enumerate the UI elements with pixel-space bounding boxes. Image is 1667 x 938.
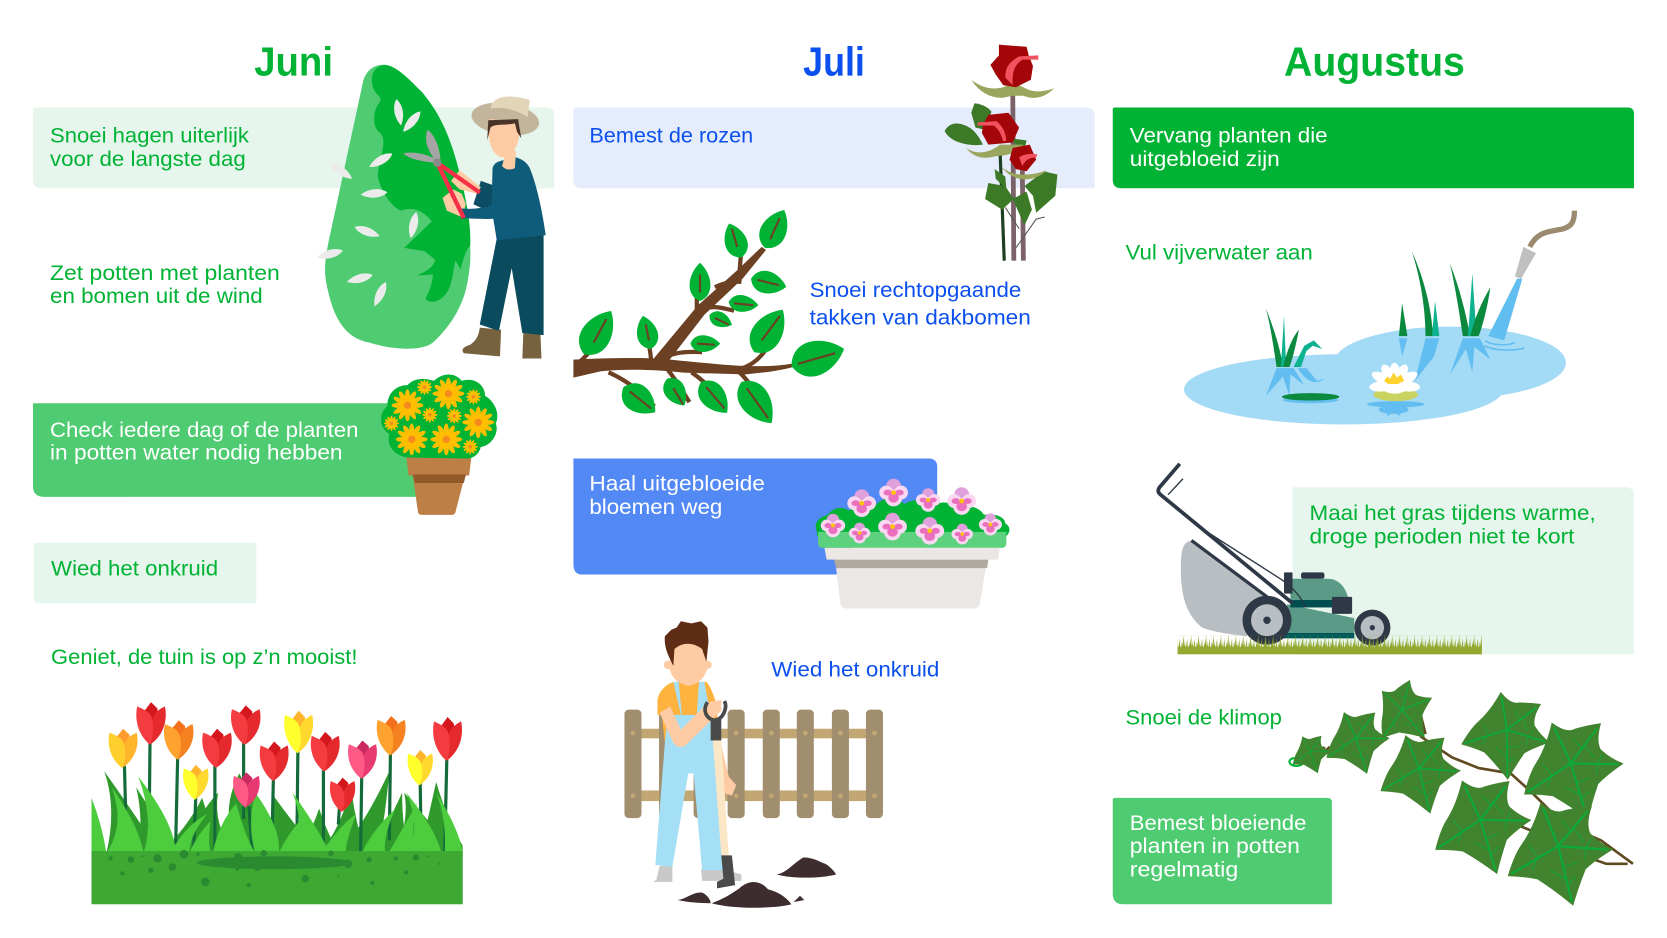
text: vijverwater: Vul vijverwater aan bbox=[1126, 241, 1313, 265]
gardener with hat and shears bbox=[403, 97, 546, 359]
text: planten water: Check iedere dag of de planten bbox=[50, 418, 359, 442]
water lily bbox=[1367, 362, 1424, 416]
reed plants bbox=[1266, 251, 1490, 367]
illustration: pond bbox=[1184, 211, 1574, 424]
text: snoei takken bbox=[810, 278, 1031, 329]
grass catcher bbox=[1181, 540, 1267, 636]
text: potten uit de wind bbox=[50, 261, 280, 308]
falling leaves bbox=[316, 98, 424, 308]
panel: uitgebloeide bloemen bbox=[573, 459, 937, 574]
panel: snoei hagen bbox=[33, 107, 554, 188]
illustration: tulip bed bbox=[91, 702, 463, 904]
text: bemest de rozen: Bemest de rozen bbox=[589, 124, 753, 148]
panel: wied het onkruid bbox=[34, 543, 256, 603]
rose leaves bbox=[945, 103, 1057, 226]
illustration: hedge with gardener bbox=[316, 65, 546, 359]
rose sepals bbox=[966, 80, 1054, 179]
text: vervang planten: uitgebloeid zijn bbox=[1130, 147, 1280, 171]
ivy leaves bbox=[1288, 671, 1631, 911]
text: potten uit de wind: Zet potten met planten bbox=[50, 261, 280, 285]
lily pad bbox=[1282, 393, 1339, 403]
text: snoei de klimop: Snoei de klimop bbox=[1126, 705, 1282, 729]
illustration: roses bbox=[945, 45, 1057, 261]
branch wood bbox=[573, 247, 819, 417]
hedge bbox=[316, 65, 470, 349]
column: Augustus bbox=[1113, 39, 1634, 911]
rose stems bbox=[1000, 90, 1045, 261]
water jet and hose bbox=[1484, 211, 1574, 350]
panel: planten water bbox=[33, 403, 420, 497]
text: snoei takken: takken van dakbomen bbox=[810, 305, 1031, 329]
ground with soil dots bbox=[91, 850, 463, 904]
tulip flowers bbox=[109, 702, 462, 800]
column: Juli bbox=[571, 39, 1095, 908]
reflections bbox=[1266, 338, 1490, 396]
tulip stems bbox=[124, 743, 447, 851]
text: bemest bloeiende: regelmatig bbox=[1130, 858, 1238, 882]
text: geniet: Geniet, de tuin is op z’n mooist! bbox=[51, 645, 357, 669]
column: Juni bbox=[33, 39, 554, 904]
panel: bemest bloeiende bbox=[1113, 798, 1332, 904]
text: potten uit de wind: en bomen uit de wind bbox=[50, 284, 263, 308]
text: vervang planten: Vervang planten die bbox=[1130, 124, 1328, 148]
panel: bemest de rozen bbox=[573, 107, 1095, 188]
text: planten water bbox=[50, 418, 359, 465]
text: uitgebloeide bloemen: bloemen weg bbox=[589, 495, 722, 519]
illustration: flower box bbox=[816, 479, 1009, 609]
text: wied het onkruid: Wied het onkruid bbox=[771, 658, 939, 682]
tulips in front bbox=[233, 772, 355, 812]
text: snoei hagen: voor de langste dag bbox=[50, 147, 246, 171]
back grass bbox=[104, 771, 463, 853]
branch leaves bbox=[571, 204, 849, 432]
illustration: flower pot bbox=[381, 374, 497, 515]
text: maai het gras: Maai het gras tijdens warme, bbox=[1310, 501, 1596, 525]
illustration: soil mounds bbox=[678, 857, 836, 908]
wheels bbox=[1243, 596, 1390, 646]
rose blooms bbox=[978, 45, 1038, 171]
front grass bbox=[91, 777, 463, 853]
text: snoei hagen bbox=[50, 124, 249, 171]
ivy stems bbox=[1319, 713, 1633, 864]
grass strip bbox=[1178, 635, 1482, 654]
text: bemest bloeiende: Bemest bloeiende bbox=[1130, 811, 1306, 835]
text: snoei hagen: Snoei hagen uiterlijk bbox=[50, 124, 249, 148]
heading: Juni: Juni bbox=[254, 39, 333, 85]
panel: maai het gras bbox=[1293, 487, 1634, 654]
mower body bbox=[1282, 572, 1354, 638]
illustration: ivy bbox=[1288, 671, 1633, 911]
leaf veins bbox=[594, 218, 835, 418]
panel: vervang planten bbox=[1113, 107, 1634, 188]
text: vervang planten bbox=[1130, 124, 1328, 171]
illustration: gardener with shovel bbox=[653, 621, 741, 888]
text: uitgebloeide bloemen bbox=[589, 471, 765, 519]
text: wied het onkruid: Wied het onkruid bbox=[51, 557, 218, 581]
text: maai het gras: droge perioden niet te kort bbox=[1310, 525, 1575, 549]
heading: Juli: Juli bbox=[803, 39, 865, 85]
text: bemest bloeiende: planten in potten bbox=[1130, 834, 1300, 858]
illustration: lawn mower bbox=[1158, 464, 1482, 654]
ivy tendril bbox=[1289, 758, 1304, 766]
heading: Augustus: Augustus bbox=[1284, 39, 1465, 85]
text: uitgebloeide bloemen: Haal uitgebloeide bbox=[589, 471, 765, 495]
handle bbox=[1158, 464, 1305, 607]
text: maai het gras bbox=[1310, 501, 1596, 549]
illustration: fence bbox=[624, 710, 883, 818]
text: bemest bloeiende bbox=[1130, 811, 1306, 882]
illustration: branch bbox=[571, 204, 849, 432]
text: snoei takken: Snoei rechtopgaande bbox=[810, 278, 1021, 302]
text: planten water: in potten water nodig hebben bbox=[50, 441, 343, 465]
